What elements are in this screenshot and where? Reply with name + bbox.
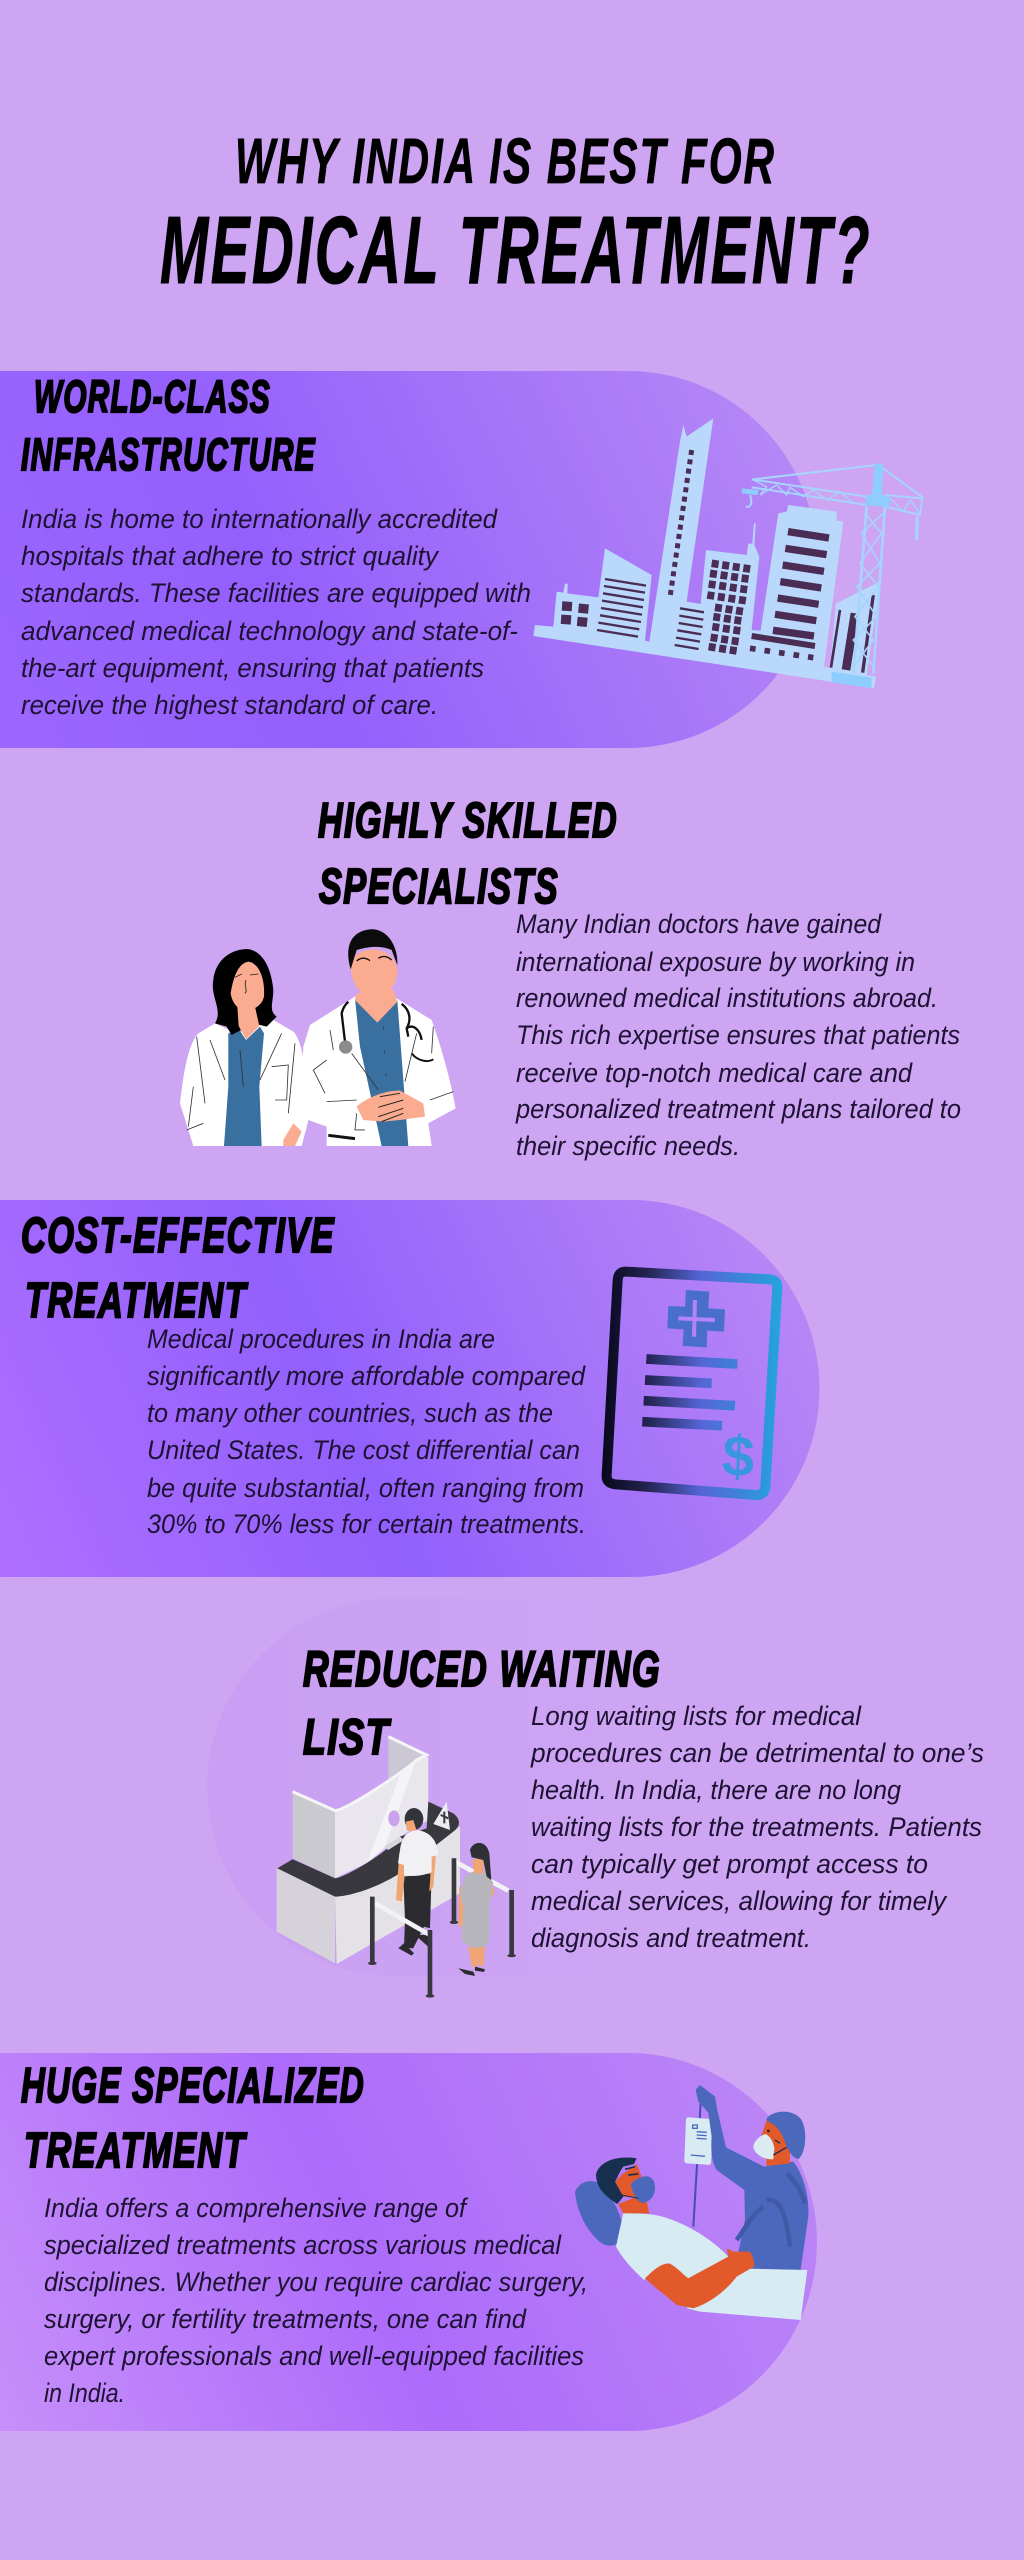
text: specialists description: renowned medical institutions abroad. — [516, 983, 938, 1013]
front post and rope — [368, 1897, 434, 1998]
text: infrastructure description — [21, 504, 531, 720]
reception desk — [277, 1737, 460, 1964]
heading: highly skilled specialists — [318, 794, 618, 914]
nurse — [696, 2085, 808, 2270]
title — [160, 125, 872, 304]
text: specialists description: Many Indian doctors have gained — [516, 909, 882, 939]
text: waiting list description: diagnosis and treatment. — [531, 1923, 811, 1953]
heading: reduced waiting list — [303, 1641, 661, 1765]
panel: cost-effective treatment — [0, 1200, 819, 1577]
heading: reduced waiting list: LIST — [303, 1709, 392, 1765]
text: specialized treatment description — [44, 2193, 588, 2408]
text: infrastructure description: the-art equipment, ensuring that patients — [21, 653, 484, 683]
text: cost description — [147, 1324, 586, 1539]
panel: world-class infrastructure — [0, 371, 923, 748]
text: specialized treatment description: India offers a comprehensive range of — [44, 2193, 468, 2223]
text: cost description: be quite substantial, often ranging from — [147, 1473, 584, 1503]
text: specialized treatment description: specialized treatments across various medical — [44, 2230, 562, 2260]
heading: world-class infrastructure: WORLD-CLASS — [34, 371, 271, 422]
text: infrastructure description: India is home to internationally accredited — [21, 504, 498, 534]
text: waiting list description: medical services, allowing for timely — [531, 1886, 947, 1916]
heading: world-class infrastructure — [21, 371, 316, 480]
text: infrastructure description: standards. These facilities are equipped with — [21, 578, 531, 608]
icon: nurse with patient — [575, 2085, 808, 2320]
text: waiting list description: Long waiting lists for medical — [531, 1701, 862, 1731]
queue posts and ropes — [450, 1858, 516, 1957]
heading: huge specialized treatment: HUGE SPECIALIZED — [21, 2059, 365, 2113]
icon: city skyline with crane — [533, 418, 923, 688]
text: waiting list description: waiting lists for the treatments. Patients — [531, 1812, 982, 1842]
heading: highly skilled specialists: SPECIALISTS — [319, 860, 559, 914]
text: specialists description: personalized treatment plans tailored to — [515, 1094, 961, 1124]
text: specialized treatment description: disciplines. Whether you require cardiac surgery, — [44, 2267, 588, 2297]
heading: huge specialized treatment — [21, 2059, 365, 2178]
text: infrastructure description: receive the highest standard of care. — [21, 690, 438, 720]
heading: cost-effective treatment: TREATMENT — [25, 1274, 248, 1328]
text: waiting list description — [530, 1701, 984, 1953]
woman in queue — [458, 1843, 495, 1976]
text: specialized treatment description: in India. — [44, 2378, 125, 2408]
text: infrastructure description: advanced medical technology and state-of- — [21, 616, 518, 646]
text: infrastructure description: hospitals that adhere to strict quality — [21, 541, 439, 571]
icon: medical bill: $ — [721, 1424, 756, 1490]
drip stand and bag — [684, 2103, 713, 2227]
section: highly skilled specialists — [180, 794, 961, 1161]
woman doctor — [180, 949, 309, 1146]
icon: medical bill — [607, 1272, 777, 1495]
text: cost description: Medical procedures in India are — [147, 1324, 495, 1354]
text: waiting list description: can typically get prompt access to — [531, 1849, 928, 1879]
text: specialized treatment description: surgery, or fertility treatments, one can find — [44, 2304, 527, 2334]
icon: two doctors — [180, 929, 456, 1146]
heading: cost-effective treatment: COST-EFFECTIVE — [21, 1209, 335, 1263]
text: specialists description: international exposure by working in — [516, 947, 915, 977]
text: cost description: significantly more affordable compared — [147, 1361, 586, 1391]
text: cost description: 30% to 70% less for certain treatments. — [147, 1509, 586, 1539]
text: cost description: United States. The cost differential can — [147, 1435, 580, 1465]
man doctor — [303, 929, 456, 1146]
patient — [596, 2157, 807, 2320]
heading: reduced waiting list: REDUCED WAITING — [303, 1641, 661, 1697]
panel: huge specialized treatment — [0, 2053, 817, 2431]
text: specialists description: their specific needs. — [516, 1131, 740, 1161]
patient pillow — [575, 2181, 624, 2246]
heading: cost-effective treatment — [21, 1209, 335, 1328]
text: waiting list description: health. In India, there are no long — [531, 1775, 901, 1805]
heading: world-class infrastructure: INFRASTRUCTURE — [21, 429, 316, 480]
heading: highly skilled specialists: HIGHLY SKILLED — [318, 794, 618, 848]
text: specialists description: This rich expertise ensures that patients — [516, 1020, 960, 1050]
text: cost description: to many other countries, such as the — [147, 1398, 553, 1428]
section: reduced waiting list — [207, 1598, 1024, 1998]
text: waiting list description: procedures can be detrimental to one’s — [530, 1738, 984, 1768]
man in queue — [384, 1808, 438, 1956]
text: specialized treatment description: expert professionals and well-equipped facilities — [44, 2341, 584, 2371]
icon: reception desk with queue — [277, 1737, 516, 1998]
text: specialists description — [515, 909, 961, 1161]
text: specialists description: receive top-notch medical care and — [516, 1058, 913, 1088]
heading: huge specialized treatment: TREATMENT — [24, 2124, 247, 2178]
